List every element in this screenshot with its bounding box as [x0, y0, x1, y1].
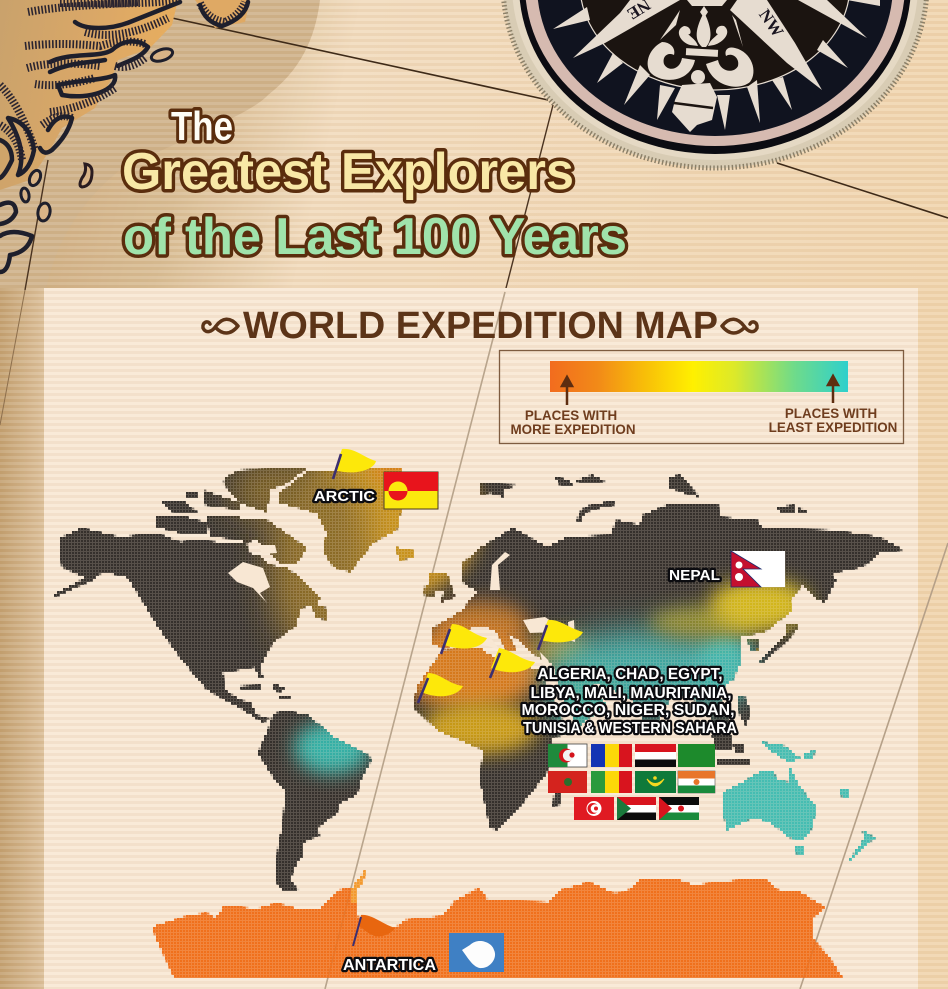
- antarctica continent: [153, 870, 843, 978]
- marker: africa yellow flags: [418, 620, 583, 703]
- vintage map coastline, top left: [0, 0, 250, 272]
- label: antarctica: ANTARTICA: [343, 957, 436, 974]
- title line: The: The: [171, 103, 233, 149]
- flag: tunisia: [574, 797, 614, 820]
- legend label: least expedition: PLACES WITH: [785, 406, 877, 421]
- label: north african countries: [522, 666, 737, 737]
- heading flourish right: [722, 319, 757, 333]
- legend: [500, 350, 904, 444]
- world map heat dot continents: [54, 468, 903, 891]
- compass rays: [553, 0, 880, 130]
- map heading: WORLD EXPEDITION MAP: [243, 305, 718, 347]
- label: north african countries: ALGERIA, CHAD, EGYPT,: [538, 666, 722, 683]
- legend arrow: more: [562, 377, 572, 405]
- panel: world expedition map: [44, 288, 948, 989]
- title line: of the Last 100 Years: of the Last 100 Years: [123, 208, 627, 266]
- flag: arctic: [384, 472, 438, 509]
- flag: western sahara: [659, 797, 699, 820]
- legend arrow: least: [828, 376, 838, 403]
- legend colour scale: [550, 361, 848, 392]
- marker: arctic yellow flag: [333, 449, 376, 479]
- flag: chad: [591, 744, 632, 767]
- flag: antarctica: [449, 933, 504, 972]
- legend label: least expedition: LEAST EXPEDITION: [769, 420, 897, 435]
- compass: [503, 0, 927, 168]
- inland seas: [228, 545, 575, 702]
- label: north african countries: LIBYA, MALI, MAURITANIA,: [530, 685, 732, 702]
- flag: egypt: [635, 744, 676, 767]
- legend label: more expedition: PLACES WITH: [525, 408, 617, 423]
- title: [122, 103, 627, 266]
- legend label: more expedition: MORE EXPEDITION: [510, 422, 636, 437]
- heading flourish left: [203, 319, 238, 333]
- compass lettering: NW: [755, 6, 787, 41]
- flags: north african countries: [548, 744, 715, 820]
- label: north african countries: TUNISIA & WESTERN SAHARA: [523, 720, 737, 737]
- flag: sudan: [617, 797, 656, 820]
- label: arctic: ARCTIC: [314, 488, 375, 505]
- flag: mauritania: [635, 771, 676, 793]
- flag: nepal: [731, 551, 785, 587]
- compass fleur-de-lis: [648, 0, 754, 132]
- title line: Greatest Explorers: Greatest Explorers: [122, 143, 574, 201]
- flag: niger: [678, 771, 715, 793]
- flag: mali: [591, 771, 632, 793]
- flag: morocco: [548, 771, 587, 793]
- label: north african countries: MOROCCO, NIGER, SUDAN,: [522, 702, 734, 719]
- flag: libya: [678, 744, 715, 767]
- flag: algeria: [548, 744, 587, 767]
- label: nepal: NEPAL: [669, 567, 720, 584]
- marker: antarctica orange flag: [353, 915, 395, 946]
